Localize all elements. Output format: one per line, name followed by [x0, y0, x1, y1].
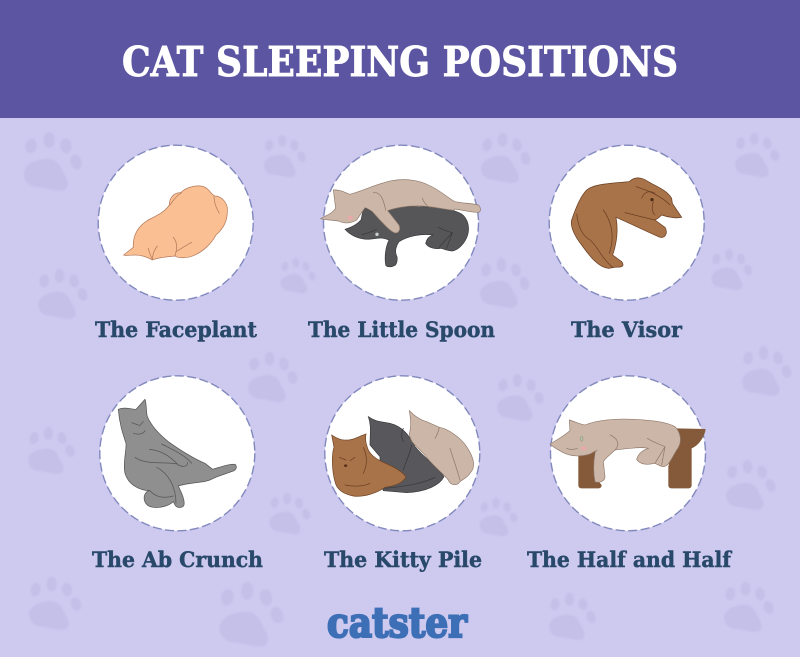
- bench: [578, 428, 706, 488]
- icon: beige cat hugging grey cat: [321, 180, 481, 267]
- label: The Ab Crunch: [92, 547, 263, 572]
- panel: the faceplant: [95, 145, 257, 342]
- icon: peach cat face down: [124, 186, 227, 260]
- icon: three cats in a pile: [332, 411, 474, 496]
- nose: [344, 464, 347, 467]
- circle: [550, 376, 706, 531]
- header band: [0, 0, 800, 118]
- cheek: [581, 446, 586, 450]
- cat: [550, 419, 680, 482]
- eye: [580, 436, 583, 441]
- panel: the little spoon: [308, 145, 495, 342]
- label: The Kitty Pile: [324, 547, 482, 572]
- panel: the half and half: [527, 376, 733, 572]
- cheek: [348, 216, 353, 220]
- label: The Faceplant: [95, 317, 257, 342]
- circle: [100, 376, 255, 531]
- panel: the kitty pile: [324, 376, 482, 572]
- label: The Visor: [571, 317, 683, 342]
- circle: [549, 145, 704, 300]
- label: The Half and Half: [527, 547, 733, 572]
- label: The Little Spoon: [308, 317, 495, 342]
- eye: [375, 233, 379, 236]
- title: CAT SLEEPING POSITIONS: [122, 38, 678, 86]
- logo: catster: catster: [327, 599, 468, 647]
- background paw prints: [24, 132, 793, 646]
- icon: brown cat with paw over eyes: [571, 178, 682, 268]
- icon: cat draped over bench: [550, 419, 706, 488]
- icon: grey cat sitting upright: [118, 399, 236, 507]
- panel: the visor: [549, 145, 704, 342]
- panel: the ab crunch: [92, 376, 263, 572]
- circle: [324, 145, 478, 300]
- circle: [98, 145, 253, 300]
- circle: [325, 376, 480, 531]
